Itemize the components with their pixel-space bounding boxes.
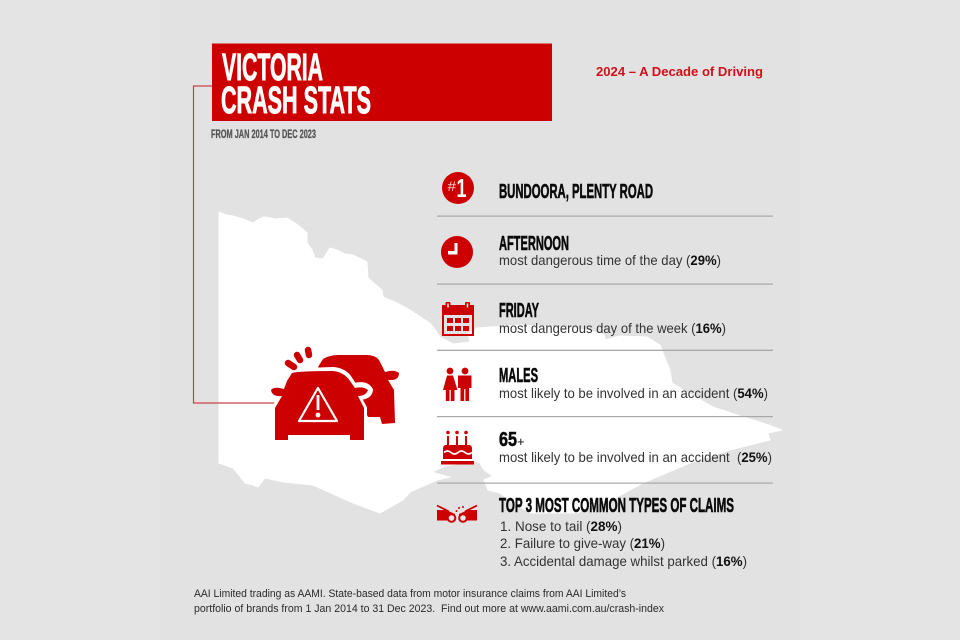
icon: two cars with warning triangle: [271, 350, 399, 440]
row: afternoon: AFTERNOON: [499, 233, 569, 255]
row: top location: [442, 172, 653, 204]
row: males: most likely to be involved in an accident (54%): [499, 385, 768, 401]
row: top location: BUNDOORA, PLENTY ROAD: [499, 181, 653, 203]
icon: birthday cake: [441, 431, 474, 464]
icon: calendar: [442, 302, 474, 335]
edition label: 2024 – A Decade of Driving: [596, 64, 763, 79]
icon: number one badge: #: [448, 178, 456, 194]
row: friday: most dangerous day of the week (16%): [499, 320, 726, 336]
claim 2: 2. Failure to give-way (21%): [500, 535, 665, 551]
icon: woman and man: [443, 368, 472, 401]
map of Victoria: [219, 212, 782, 513]
row: friday: FRIDAY: [499, 300, 539, 322]
row: age 65+: [441, 429, 772, 465]
row: claims: [437, 495, 747, 569]
row: age 65+: 65: [499, 429, 517, 451]
claim 3: 3. Accidental damage whilst parked (16%): [500, 553, 747, 569]
connector line from title to car icon: [194, 86, 276, 403]
footnote: portfolio of brands from 1 Jan 2014 to 31 Dec 2023. Find out more at www.aami.com.au/crash-index: [194, 603, 664, 615]
claim 1: 1. Nose to tail (28%): [500, 518, 622, 534]
row: claims: TOP 3 MOST COMMON TYPES OF CLAIMS: [499, 495, 734, 517]
title banner: [212, 44, 552, 121]
icon: number one badge: [442, 172, 474, 204]
row: friday: [442, 300, 726, 336]
footnote: [194, 588, 664, 615]
row: males: [443, 365, 768, 401]
row: afternoon: most dangerous time of the day (29%): [499, 252, 721, 268]
row: age 65+: +: [517, 434, 525, 449]
row: age 65+: most likely to be involved in an accident (25%): [499, 449, 772, 465]
icon: clock: [441, 236, 473, 268]
date range subtitle: FROM JAN 2014 TO DEC 2023: [211, 127, 316, 141]
title line 2: CRASH STATS: [221, 80, 371, 122]
icon: head-on car crash: [437, 506, 477, 522]
row: males: MALES: [499, 365, 538, 387]
row: afternoon: [441, 233, 721, 268]
icon: number one badge: 1: [456, 173, 466, 203]
footnote: AAI Limited trading as AAMI. State-based data from motor insurance claims from AAI Limited’s: [194, 588, 626, 600]
title line 1: VICTORIA: [222, 47, 323, 89]
